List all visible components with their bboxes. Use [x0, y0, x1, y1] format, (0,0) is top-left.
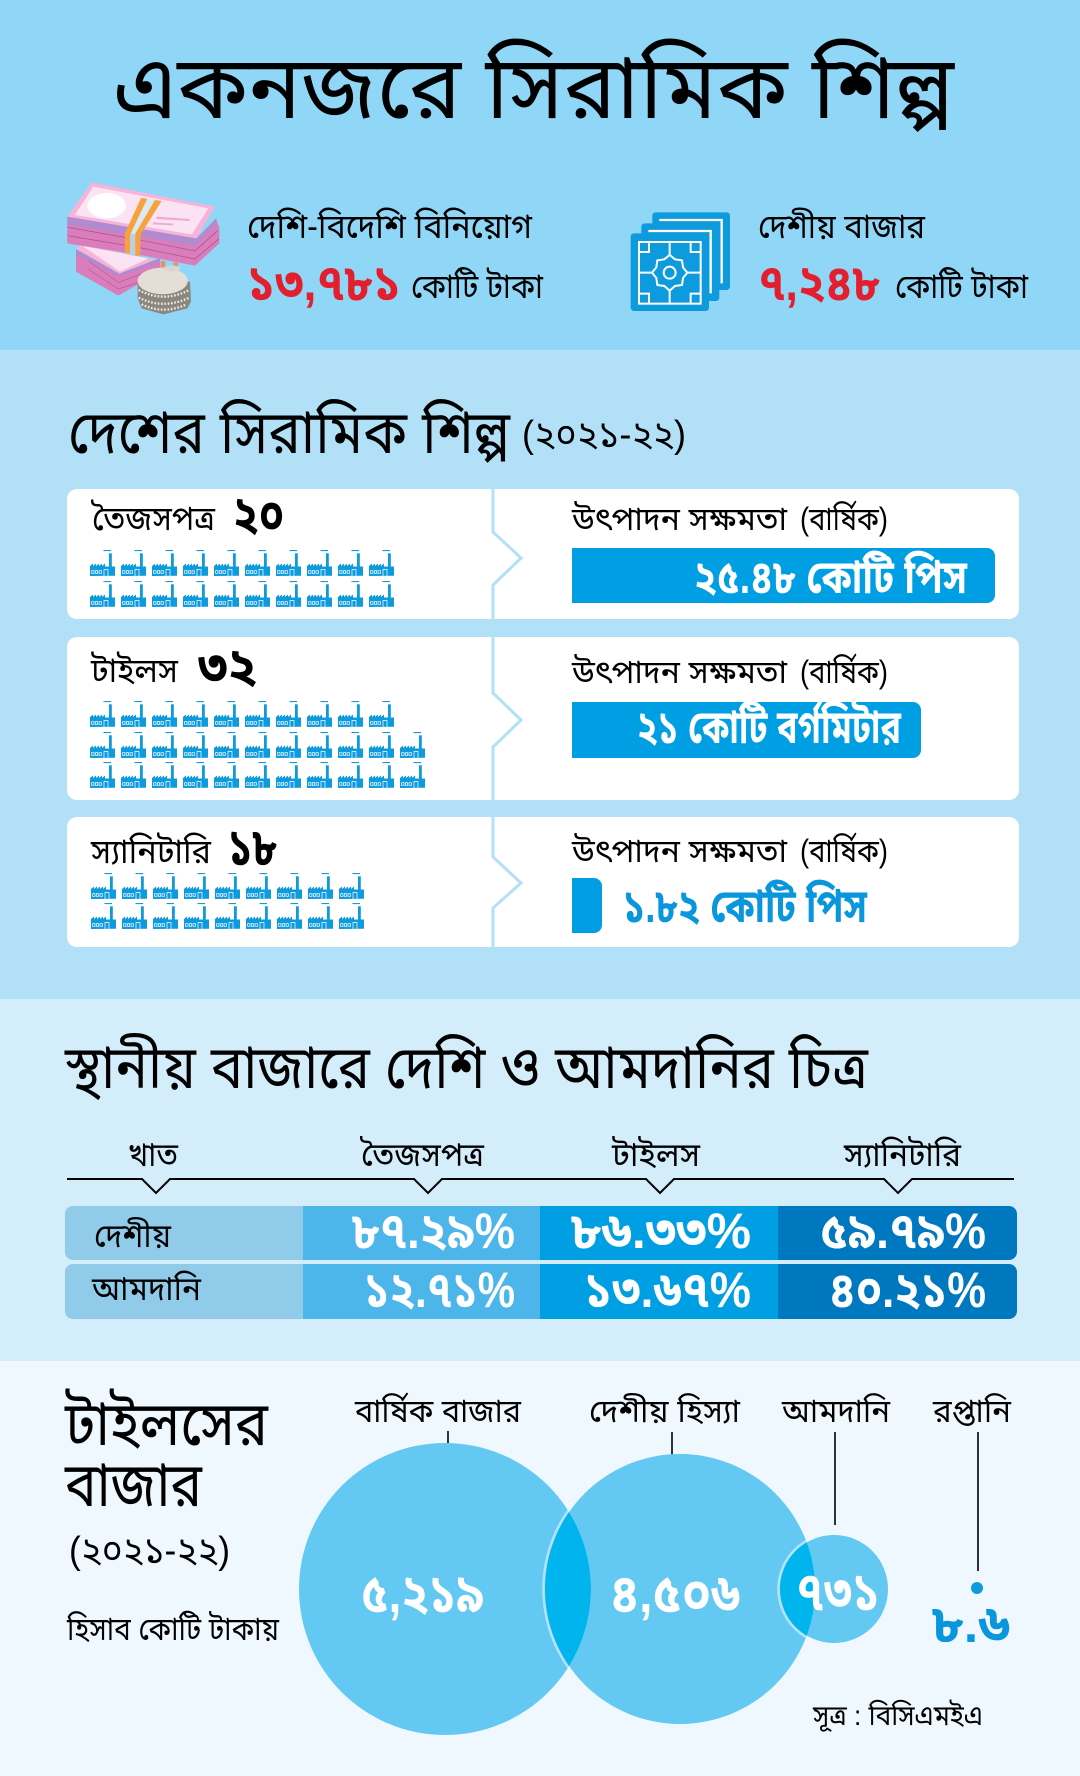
band: industry section background	[0, 350, 1080, 999]
capacity label: (বার্ষিক)	[800, 653, 888, 690]
table row: domestic: ৫৯.৭৯%	[820, 1203, 986, 1259]
capacity label: (বার্ষিক)	[800, 832, 888, 869]
tableware label: তৈজসপত্র	[90, 499, 215, 538]
capacity value: ২১ কোটি বর্গমিটার	[637, 699, 902, 753]
domestic market unit: কোটি টাকা	[895, 267, 1029, 306]
heading: local market picture: স্থানীয় বাজারে দেশি ও আমদানির চিত্র	[64, 1034, 869, 1101]
value: annual market: ৫,২১৯	[361, 1564, 484, 1624]
icon: money stack and coins	[67, 182, 219, 314]
table header	[67, 1135, 1014, 1193]
source: সূত্র : বিসিএমইএ	[812, 1699, 983, 1732]
sanitary label: স্যানিটারি	[90, 832, 212, 871]
tiles label: টাইলস	[90, 651, 179, 690]
leader lines	[448, 1431, 978, 1571]
circle: imports	[778, 1534, 890, 1644]
table row: domestic: ৮৭.২৯%	[352, 1203, 515, 1259]
band: header background	[0, 0, 1080, 350]
capacity value: ১.৮২ কোটি পিস	[623, 878, 868, 932]
note: figures in crore taka: হিসাব কোটি টাকায়	[66, 1611, 280, 1647]
band: tiles market section background	[0, 1361, 1080, 1776]
table row: import	[65, 1262, 1017, 1319]
heading: country's ceramic industry: (২০২১-২২)	[522, 414, 686, 456]
panel: tableware	[67, 486, 1019, 619]
domestic market value: ৭,২৪৮	[758, 255, 880, 311]
icons: 32 factories	[90, 701, 425, 788]
table row: import: ৪০.২১%	[829, 1262, 986, 1318]
icon: stacked tiles	[631, 212, 730, 311]
capacity bar	[572, 702, 921, 758]
capacity bar	[572, 548, 995, 603]
label: exports: রপ্তানি	[932, 1393, 1012, 1429]
table header: স্যানিটারি	[843, 1135, 961, 1173]
overlap	[545, 1512, 591, 1666]
capacity label: উৎপাদন সক্ষমতা	[571, 833, 787, 869]
investment unit: কোটি টাকা	[411, 267, 544, 306]
label: imports: আমদানি	[781, 1393, 891, 1429]
heading: tiles market	[64, 1388, 269, 1572]
icons: 20 factories	[90, 550, 394, 607]
capacity label: (বার্ষিক)	[800, 500, 888, 537]
investment value: ১৩,৭৮১	[247, 255, 401, 311]
panel: tiles	[67, 637, 1019, 800]
panel: sanitary	[67, 817, 1019, 947]
icons: 18 factories	[91, 873, 364, 929]
circle: domestic share	[542, 1454, 807, 1724]
table row: import: ১৩.৬৭%	[584, 1262, 751, 1318]
text block: domestic market	[758, 207, 1029, 311]
investment label: দেশি-বিদেশি বিনিয়োগ	[247, 207, 533, 246]
table header: তৈজসপত্র	[359, 1135, 485, 1173]
tiles count: ৩২	[198, 638, 257, 696]
capacity value: ২৫.৪৮ কোটি পিস	[694, 549, 968, 603]
sanitary count: ১৮	[228, 819, 277, 877]
band: local market section background	[0, 999, 1080, 1361]
table row: import: আমদানি	[91, 1269, 202, 1307]
heading: tiles market: টাইলসের	[64, 1388, 269, 1459]
circle: annual market	[299, 1443, 591, 1735]
table row: domestic	[65, 1203, 1017, 1260]
value: exports: ৮.৬	[932, 1596, 1010, 1654]
circle: exports dot	[971, 1582, 983, 1594]
title: একনজরে সিরামিক শিল্প	[113, 38, 956, 137]
heading: tiles market: বাজার	[64, 1451, 203, 1520]
table row: domestic: ৮৬.৩৩%	[571, 1203, 751, 1259]
table header: খাত	[128, 1136, 179, 1173]
heading: tiles market: (২০২১-২২)	[69, 1530, 230, 1572]
table row: import: ১২.৭১%	[364, 1262, 515, 1318]
table row: domestic: দেশীয়	[94, 1216, 171, 1254]
capacity label: উৎপাদন সক্ষমতা	[571, 654, 787, 690]
heading: country's ceramic industry: দেশের সিরামিক শিল্প	[68, 399, 511, 466]
text block: investment	[247, 207, 544, 311]
table header: টাইলস	[611, 1135, 700, 1173]
capacity label: উৎপাদন সক্ষমতা	[571, 501, 787, 537]
label: domestic share: দেশীয় হিস্যা	[589, 1393, 740, 1429]
value: imports: ৭৩১	[796, 1562, 880, 1622]
label: annual market: বার্ষিক বাজার	[354, 1392, 522, 1429]
value: domestic share: ৪,৫০৬	[610, 1564, 740, 1624]
capacity bar	[572, 878, 602, 933]
domestic market label: দেশীয় বাজার	[758, 207, 926, 246]
tableware count: ২০	[233, 486, 284, 544]
